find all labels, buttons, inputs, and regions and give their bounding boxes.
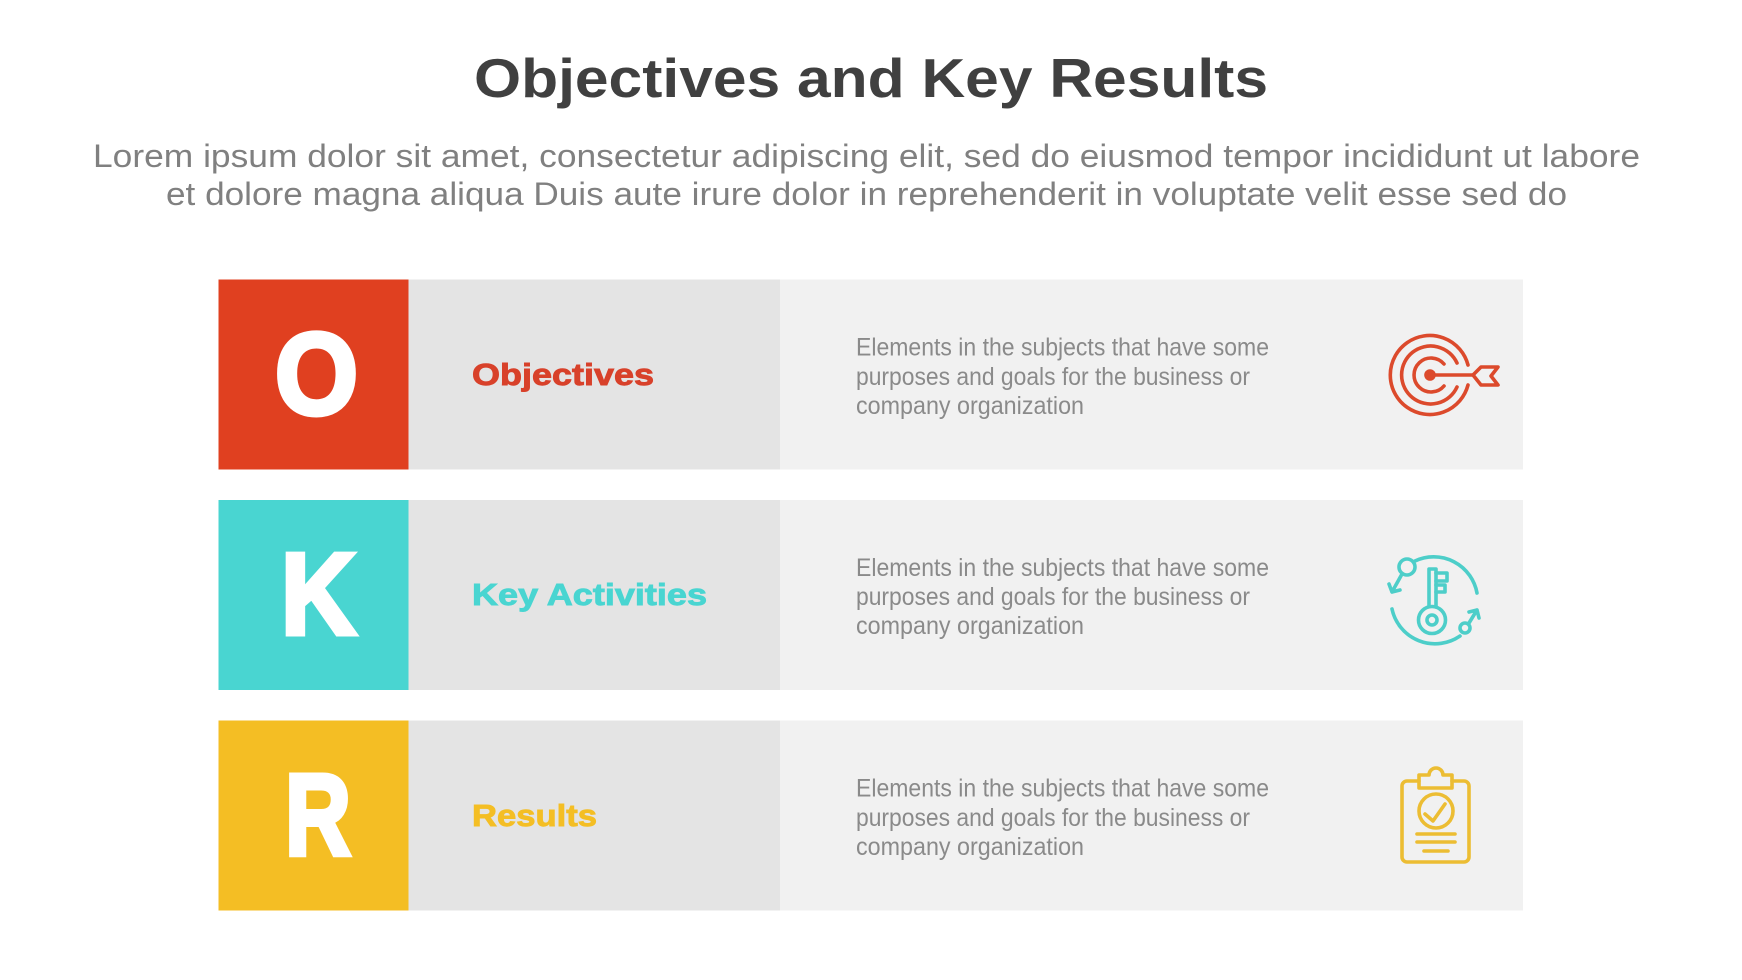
icon: target with arrow [1390,336,1498,415]
description: key activities: company organization [856,612,1084,640]
description: results: purposes and goals for the business or [856,804,1250,832]
description: results [856,774,1269,861]
description: objectives: purposes and goals for the business or [856,363,1250,391]
description: results: Elements in the subjects that have some [856,774,1269,802]
letter R: R [285,750,351,880]
panel: key activities row [218,500,1523,690]
label: results: Results [472,798,597,833]
subtitle text block: et dolore magna aliqua Duis aute irure dolor in reprehenderit in voluptate velit esse sed do [166,176,1567,212]
panel: objectives row [218,280,1523,470]
title: Objectives and Key Results [474,47,1268,109]
icon: key with cycle arrows [1389,557,1479,644]
letter K: K [281,529,356,659]
description: key activities [856,554,1269,640]
label: key activities: Key Activities [472,577,707,612]
subtitle text block [93,138,1640,212]
panel: results row [218,720,1523,910]
description: key activities: Elements in the subjects that have some [856,554,1269,582]
description: objectives [856,334,1269,420]
description: objectives: Elements in the subjects that have some [856,334,1269,362]
letter O: O [275,309,358,439]
label: objectives: Objectives [472,357,654,392]
description: key activities: purposes and goals for the business or [856,583,1250,611]
description: objectives: company organization [856,392,1084,420]
icon: clipboard with check [1402,768,1469,862]
subtitle text block: Lorem ipsum dolor sit amet, consectetur adipiscing elit, sed do eiusmod tempor incididunt ut labore [93,138,1640,174]
description: results: company organization [856,833,1084,861]
